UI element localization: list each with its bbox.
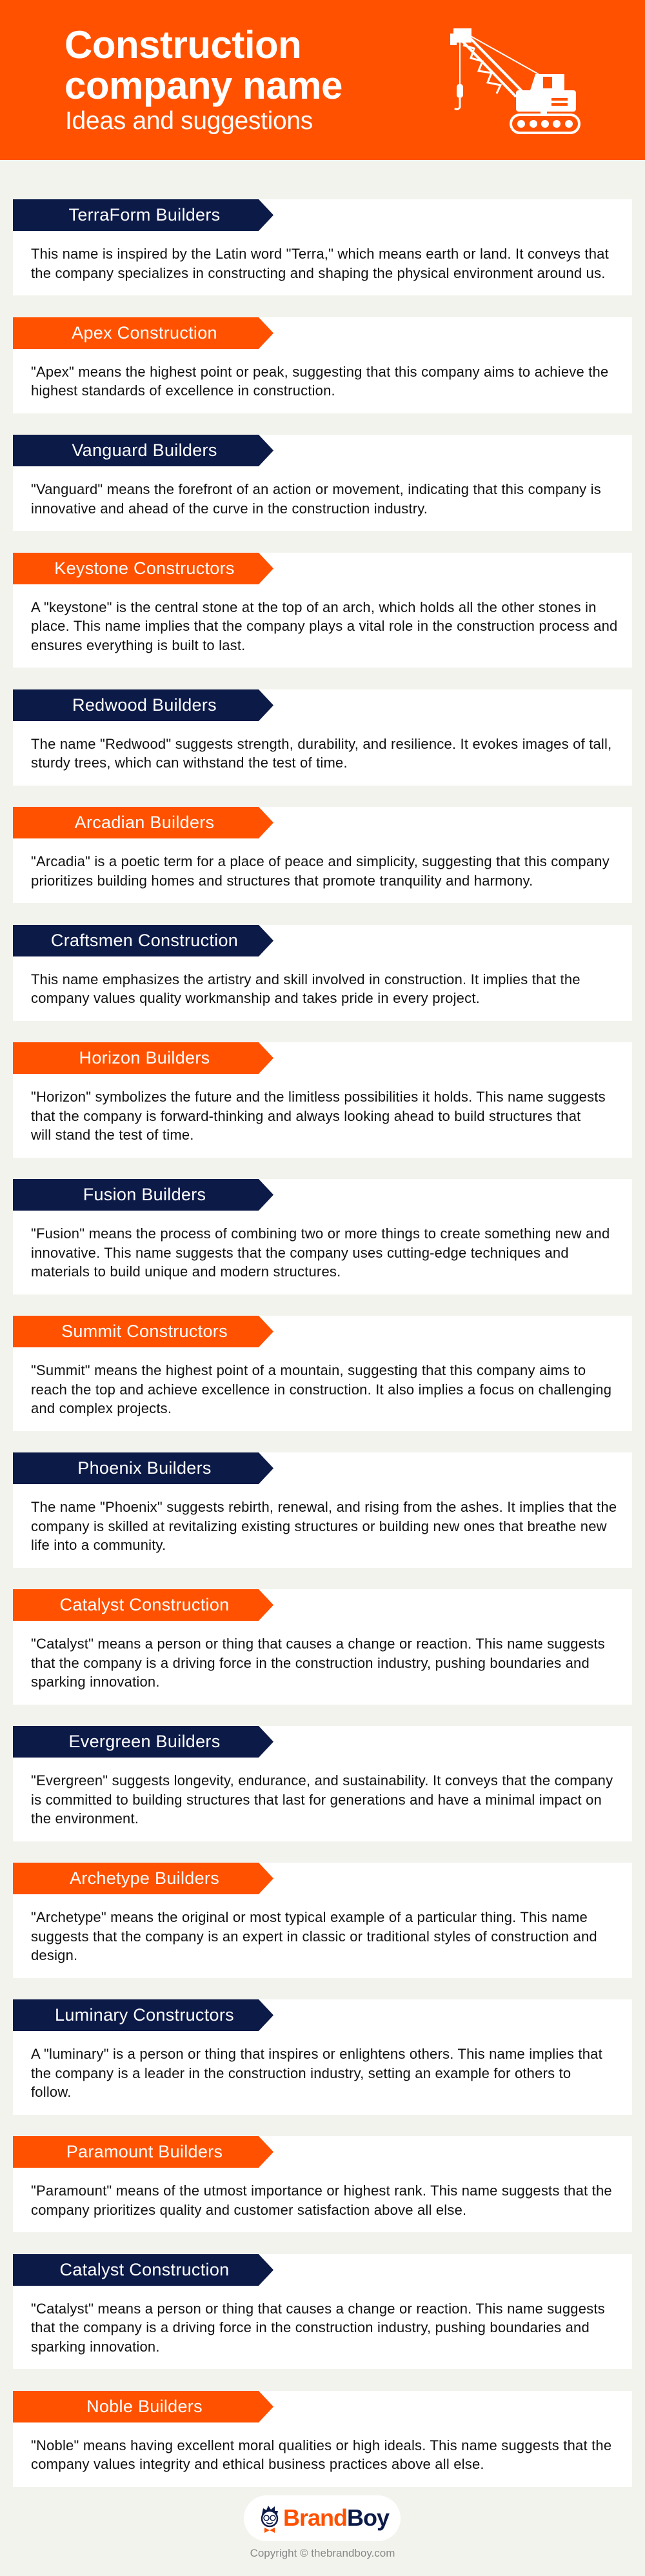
card: Fusion Builders — [13, 1179, 632, 1294]
card: Apex Construction: "Apex" means the highest point or peak, suggesting that this company aims to achieve the — [31, 364, 608, 379]
footer logo: BrandBoy — [244, 2495, 401, 2541]
card: Vanguard Builders: "Vanguard" means the forefront of an action or movement, indicating that this company is — [31, 481, 601, 497]
card: TerraForm Builders: the company specializes in constructing and shaping the physical environment around us. — [31, 264, 606, 281]
card: Evergreen Builders: "Evergreen" suggests longevity, endurance, and sustainability. It conveys that the company — [31, 1772, 613, 1788]
card: Evergreen Builders: the environment. — [31, 1810, 139, 1827]
card: Paramount Builders — [13, 2136, 632, 2232]
card: Vanguard Builders: innovative and ahead of the curve in the construction industry. — [31, 500, 428, 516]
card: Horizon Builders — [13, 1042, 632, 1157]
card: Redwood Builders: Redwood Builders — [72, 695, 217, 715]
card: Keystone Constructors: A "keystone" is the central stone at the top of an arch, which holds all the other stones in — [31, 599, 597, 615]
card: Fusion Builders: materials to build unique and modern structures. — [31, 1263, 341, 1280]
card: Archetype Builders: suggests that the company is an expert in classic or traditional styles of construction and — [31, 1928, 597, 1944]
card: Catalyst Construction: "Catalyst" means a person or thing that causes a change or reaction. This name suggests — [31, 1636, 605, 1652]
copyright: Copyright © thebrandboy.com — [250, 2547, 395, 2559]
card: Keystone Constructors: Keystone Constructors — [54, 559, 235, 578]
card: Keystone Constructors: place. This name implies that the company plays a vital role in the construction process and — [31, 618, 617, 634]
card: Redwood Builders: The name "Redwood" suggests strength, durability, and resilience. It evokes images of tall, — [31, 735, 611, 752]
card: Catalyst Construction: Catalyst Construction — [60, 1595, 229, 1614]
card: Catalyst Construction (2) — [13, 2254, 632, 2369]
card: Horizon Builders: Horizon Builders — [79, 1048, 210, 1067]
header banner — [0, 0, 645, 160]
card: Catalyst Construction: that the company is a driving force in the construction industry, pushing boundaries and — [31, 1655, 590, 1670]
card: Craftsmen Construction — [13, 925, 632, 1020]
subtitle: Ideas and suggestions — [65, 107, 313, 135]
card: TerraForm Builders: TerraForm Builders — [69, 205, 220, 224]
card: Catalyst Construction (2): "Catalyst" means a person or thing that causes a change or reaction. This name suggests — [31, 2300, 605, 2317]
card: Vanguard Builders: Vanguard Builders — [72, 441, 217, 460]
card: Fusion Builders: "Fusion" means the process of combining two or more things to create something new and — [31, 1225, 610, 1242]
card: TerraForm Builders: This name is inspired by the Latin word "Terra," which means earth or land. It conveys that — [31, 246, 609, 262]
card: Apex Construction: highest standards of excellence in construction. — [31, 382, 335, 399]
card: Summit Constructors — [13, 1316, 632, 1431]
card: Phoenix Builders: company is skilled at revitalizing existing structures or building new ones that breathe new — [31, 1518, 607, 1534]
card: Vanguard Builders — [13, 435, 632, 531]
logo text: BrandBoy — [283, 2504, 389, 2531]
card: Evergreen Builders — [13, 1726, 632, 1841]
card: Craftsmen Construction: company values quality workmanship and takes pride in every project. — [31, 990, 480, 1006]
card: Paramount Builders: "Paramount" means of the utmost importance or highest rank. This name suggests that the — [31, 2183, 612, 2199]
card: Noble Builders — [13, 2390, 632, 2487]
card: Arcadian Builders — [13, 807, 632, 903]
card: Horizon Builders: "Horizon" symbolizes the future and the limitless possibilities it holds. This name suggests — [31, 1089, 606, 1105]
icon: brandboy face — [261, 2506, 279, 2533]
card: Catalyst Construction: sparking innovation. — [31, 1674, 160, 1690]
card: Summit Constructors: and complex projects. — [31, 1400, 172, 1416]
card: Luminary Constructors: Luminary Constructors — [55, 2005, 234, 2025]
card: Fusion Builders: Fusion Builders — [83, 1185, 206, 1204]
card: Phoenix Builders: Phoenix Builders — [77, 1458, 212, 1478]
card: Luminary Constructors — [13, 1999, 632, 2114]
card: Craftsmen Construction: This name emphasizes the artistry and skill involved in construction. It implies that the — [31, 971, 580, 987]
card: Archetype Builders: "Archetype" means the original or most typical example of a particular thing. This name — [31, 1909, 588, 1925]
card: Archetype Builders: design. — [31, 1947, 77, 1963]
card: Noble Builders: company values integrity and ethical business practices above all else. — [31, 2456, 484, 2472]
card: Redwood Builders: sturdy trees, which can withstand the test of time. — [31, 755, 348, 771]
card: Phoenix Builders: The name "Phoenix" suggests rebirth, renewal, and rising from the ashes. It implies that the — [31, 1499, 617, 1515]
card: Redwood Builders — [13, 689, 632, 786]
card: Craftsmen Construction: Craftsmen Construction — [51, 930, 238, 949]
card: Summit Constructors: Summit Constructors — [61, 1322, 228, 1341]
card: Arcadian Builders: Arcadian Builders — [75, 813, 214, 832]
card: Catalyst Construction (2): Catalyst Construction — [60, 2260, 229, 2279]
card: Catalyst Construction — [13, 1589, 632, 1704]
card: Catalyst Construction (2): sparking innovation. — [31, 2339, 160, 2354]
card: Horizon Builders: will stand the test of time. — [31, 1127, 194, 1143]
title: company name — [64, 64, 342, 107]
card: Keystone Constructors: ensures everything is built to last. — [31, 637, 245, 653]
title — [64, 23, 342, 107]
card: Archetype Builders: Archetype Builders — [70, 1868, 219, 1888]
card: Evergreen Builders: Evergreen Builders — [68, 1732, 221, 1751]
card: Apex Construction: Apex Construction — [72, 322, 217, 342]
card: Summit Constructors: reach the top and achieve excellence in construction. It also implies a focus on challenging — [31, 1382, 611, 1397]
card: Arcadian Builders: "Arcadia" is a poetic term for a place of peace and simplicity, suggesting that this company — [31, 853, 610, 869]
card: Evergreen Builders: is committed to building structures that last for generations and have a minimal impact on — [31, 1792, 602, 1807]
card: Keystone Constructors — [13, 552, 632, 668]
card: Luminary Constructors: follow. — [31, 2084, 72, 2100]
card: Paramount Builders: company prioritizes quality and customer satisfaction above all else. — [31, 2202, 466, 2217]
card: Summit Constructors: "Summit" means the highest point of a mountain, suggesting that this company aims to — [31, 1362, 586, 1378]
icon: crane — [450, 28, 580, 134]
title: Construction — [64, 23, 301, 66]
card: Luminary Constructors: the company is a leader in the construction industry, setting an example for others to — [31, 2065, 571, 2081]
card: Horizon Builders: that the company is forward-thinking and always looking ahead to build structures that — [31, 1108, 580, 1124]
card: Paramount Builders: Paramount Builders — [66, 2142, 223, 2161]
card: Phoenix Builders: life into a community. — [31, 1537, 166, 1553]
card: Noble Builders: "Noble" means having excellent moral qualities or high ideals. This name suggests that the — [31, 2437, 611, 2453]
card: Catalyst Construction (2): that the company is a driving force in the construction industry, pushing boundaries and — [31, 2319, 590, 2335]
card: Apex Construction — [13, 317, 632, 413]
card: TerraForm Builders — [13, 199, 632, 295]
card: Fusion Builders: innovative. This name suggests that the company uses cutting-edge techniques and — [31, 1245, 569, 1260]
card: Noble Builders: Noble Builders — [86, 2397, 203, 2416]
card: Luminary Constructors: A "luminary" is a person or thing that inspires or enlightens others. This name implies that — [31, 2046, 602, 2062]
card: Phoenix Builders — [13, 1452, 632, 1567]
card: Archetype Builders — [13, 1863, 632, 1977]
card: Arcadian Builders: prioritizes building homes and structures that promote tranquility and harmony. — [31, 872, 533, 889]
